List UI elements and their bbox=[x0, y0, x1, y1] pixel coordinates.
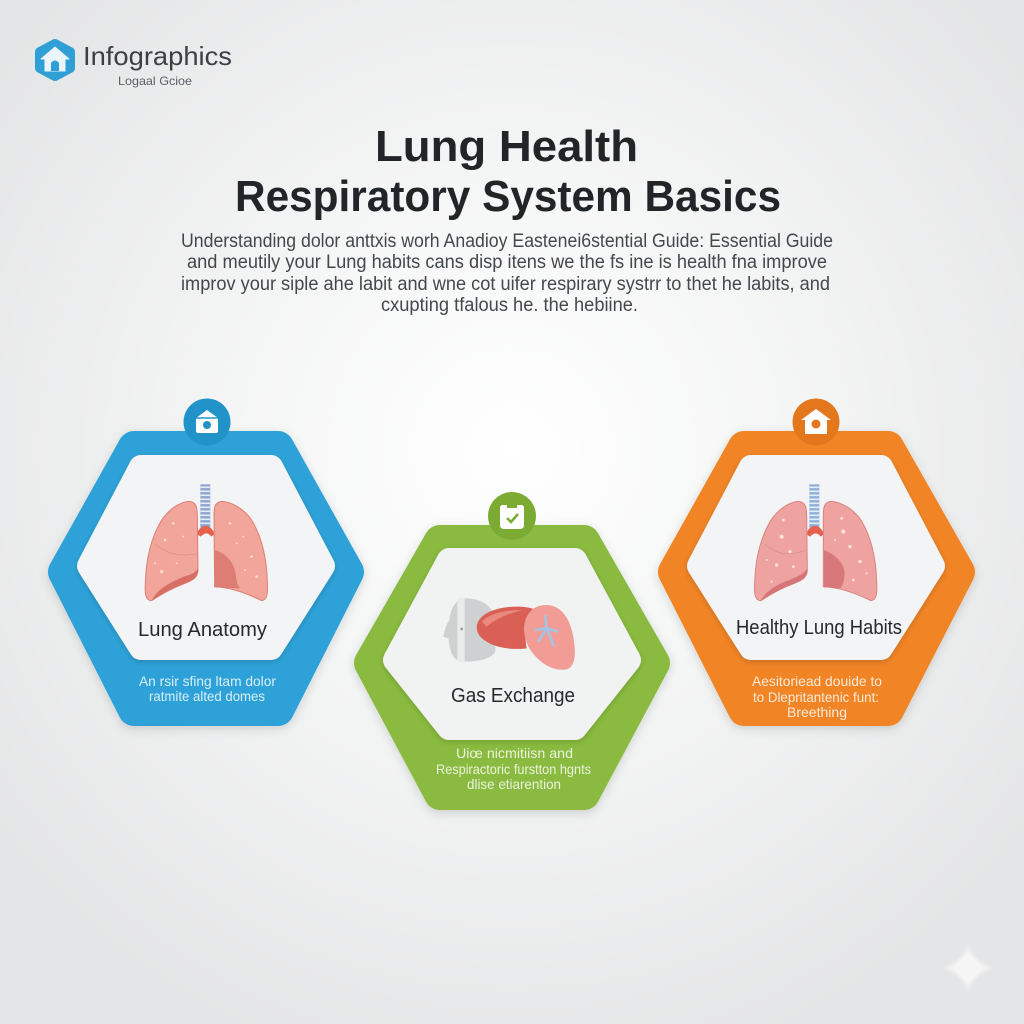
heading: Lung Anatomy bbox=[138, 619, 267, 641]
logo wordmark: Infographics bbox=[83, 41, 232, 71]
description: Breething bbox=[787, 704, 847, 720]
intro text block: cxupting tfalous he. the hebiine. bbox=[381, 295, 638, 316]
inner panel bbox=[395, 560, 629, 728]
description bbox=[139, 673, 276, 704]
description: to Dlepritantenic funt: bbox=[753, 689, 879, 705]
panel: healthy lung habits bbox=[674, 398, 959, 720]
intro text block: Understanding dolor anttxis worh Anadioy Eastenei6stential Guide: Essential Guide bbox=[181, 231, 833, 252]
description: dlise etiarention bbox=[467, 776, 561, 792]
green hexagon bbox=[370, 541, 654, 794]
panel: lung anatomy bbox=[64, 398, 348, 710]
description: ratmite alted domes bbox=[149, 688, 265, 704]
description: Respiractoric furstton hgnts bbox=[436, 761, 591, 777]
intro text block: improv your siple ahe labit and wne cot uifer respirary systrr to thet he labits, and bbox=[181, 274, 830, 295]
logo tagline: Logaal Gcioe bbox=[118, 74, 192, 88]
title: Respiratory System Basics bbox=[235, 172, 781, 221]
badge: blue bbox=[184, 398, 230, 446]
panel: gas exchange bbox=[370, 492, 654, 794]
heading: Gas Exchange bbox=[451, 685, 575, 707]
description: Aesitoriead douide to bbox=[752, 673, 882, 689]
icon: house logo bbox=[40, 44, 70, 76]
intro text block bbox=[181, 231, 833, 316]
description: Uiœ nicmitiisn and bbox=[456, 745, 573, 761]
badge: green bbox=[488, 492, 536, 540]
inner panel bbox=[89, 467, 323, 648]
intro text block: and meutily your Lung habits cans disp itens we the fs ine is health fna improve bbox=[187, 252, 827, 273]
inner panel bbox=[699, 467, 933, 648]
icon: sparkle bbox=[944, 944, 992, 992]
heading: Healthy Lung Habits bbox=[736, 617, 902, 639]
description bbox=[752, 673, 882, 720]
description bbox=[436, 745, 591, 792]
logo bbox=[40, 41, 232, 88]
description: An rsir sfing ltam dolor bbox=[139, 673, 276, 689]
title: Lung Health bbox=[375, 122, 638, 171]
icon: gas exchange bbox=[443, 598, 575, 670]
orange hexagon bbox=[674, 447, 959, 710]
icon: lungs bbox=[145, 484, 268, 601]
title bbox=[235, 122, 781, 221]
badge: orange bbox=[792, 398, 840, 446]
blue hexagon bbox=[64, 447, 348, 710]
icon: lungs bbox=[754, 484, 877, 601]
